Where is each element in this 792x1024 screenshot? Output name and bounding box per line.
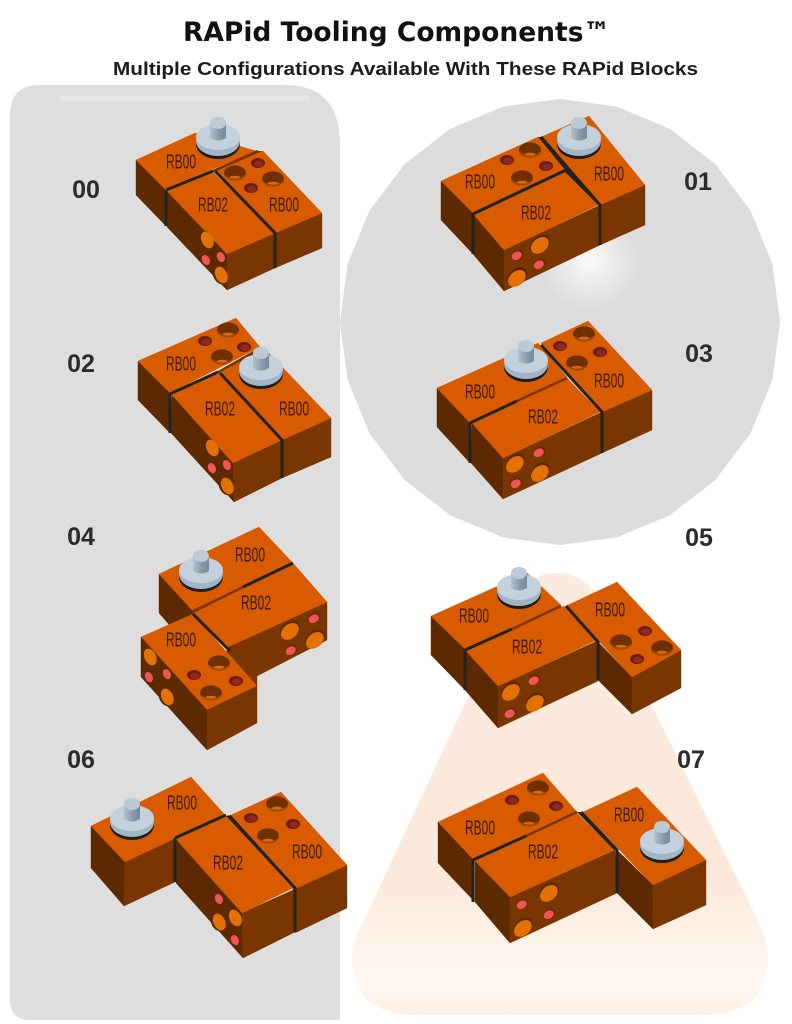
configuration 07: RB02	[528, 840, 558, 864]
title: RAPid Tooling Components™	[183, 17, 610, 48]
configuration 01: RB02	[521, 202, 551, 224]
number 00: 00	[72, 176, 100, 204]
configuration 06: RB00	[292, 840, 322, 864]
configuration 03: RB02	[528, 406, 558, 428]
number 01: 01	[684, 168, 712, 196]
configuration 04	[139, 527, 329, 750]
panel: left grey rounded background	[10, 85, 340, 1020]
configuration 00: RB00	[269, 194, 299, 216]
number 07: 07	[677, 746, 705, 774]
configuration 07: RB00	[614, 804, 644, 826]
number 05: 05	[685, 524, 713, 552]
panel: peach rounded triangle background	[352, 573, 768, 1015]
number 06: 06	[67, 746, 95, 774]
configuration 04: RB02	[241, 592, 271, 614]
configuration 03: RB00	[465, 380, 495, 404]
panel: grey faceted circle background	[340, 99, 780, 545]
configuration 06: RB00	[167, 792, 197, 814]
left panel highlight	[60, 96, 310, 101]
configuration 01: RB00	[594, 162, 624, 186]
configuration 02: RB00	[279, 398, 309, 420]
configuration 04: RB00	[166, 628, 196, 652]
configuration 05: RB02	[512, 636, 542, 658]
circle highlight	[540, 214, 640, 310]
configuration 06: RB02	[213, 852, 243, 874]
configuration 07: RB00	[465, 816, 495, 840]
configuration 00: RB02	[198, 194, 228, 216]
configuration 03	[437, 321, 652, 499]
configuration 00	[136, 117, 322, 290]
subtitle: Multiple Configurations Available With These RAPid Blocks	[113, 58, 698, 79]
configuration 03: RB00	[594, 370, 624, 392]
configuration 00: RB00	[166, 150, 196, 174]
number 03: 03	[685, 340, 713, 368]
configuration 02: RB00	[166, 352, 196, 376]
configuration 05	[431, 567, 681, 728]
configuration 04: RB00	[235, 544, 265, 566]
configuration 06	[91, 777, 347, 958]
configuration 05: RB00	[459, 604, 489, 628]
configuration 01	[441, 116, 645, 291]
number 02: 02	[67, 350, 95, 378]
number 04: 04	[67, 523, 95, 551]
configuration 01: RB00	[465, 170, 495, 194]
configuration 02: RB02	[205, 398, 235, 420]
configuration 05: RB00	[595, 598, 625, 622]
configuration 02	[138, 318, 331, 502]
configuration 07	[438, 773, 706, 943]
